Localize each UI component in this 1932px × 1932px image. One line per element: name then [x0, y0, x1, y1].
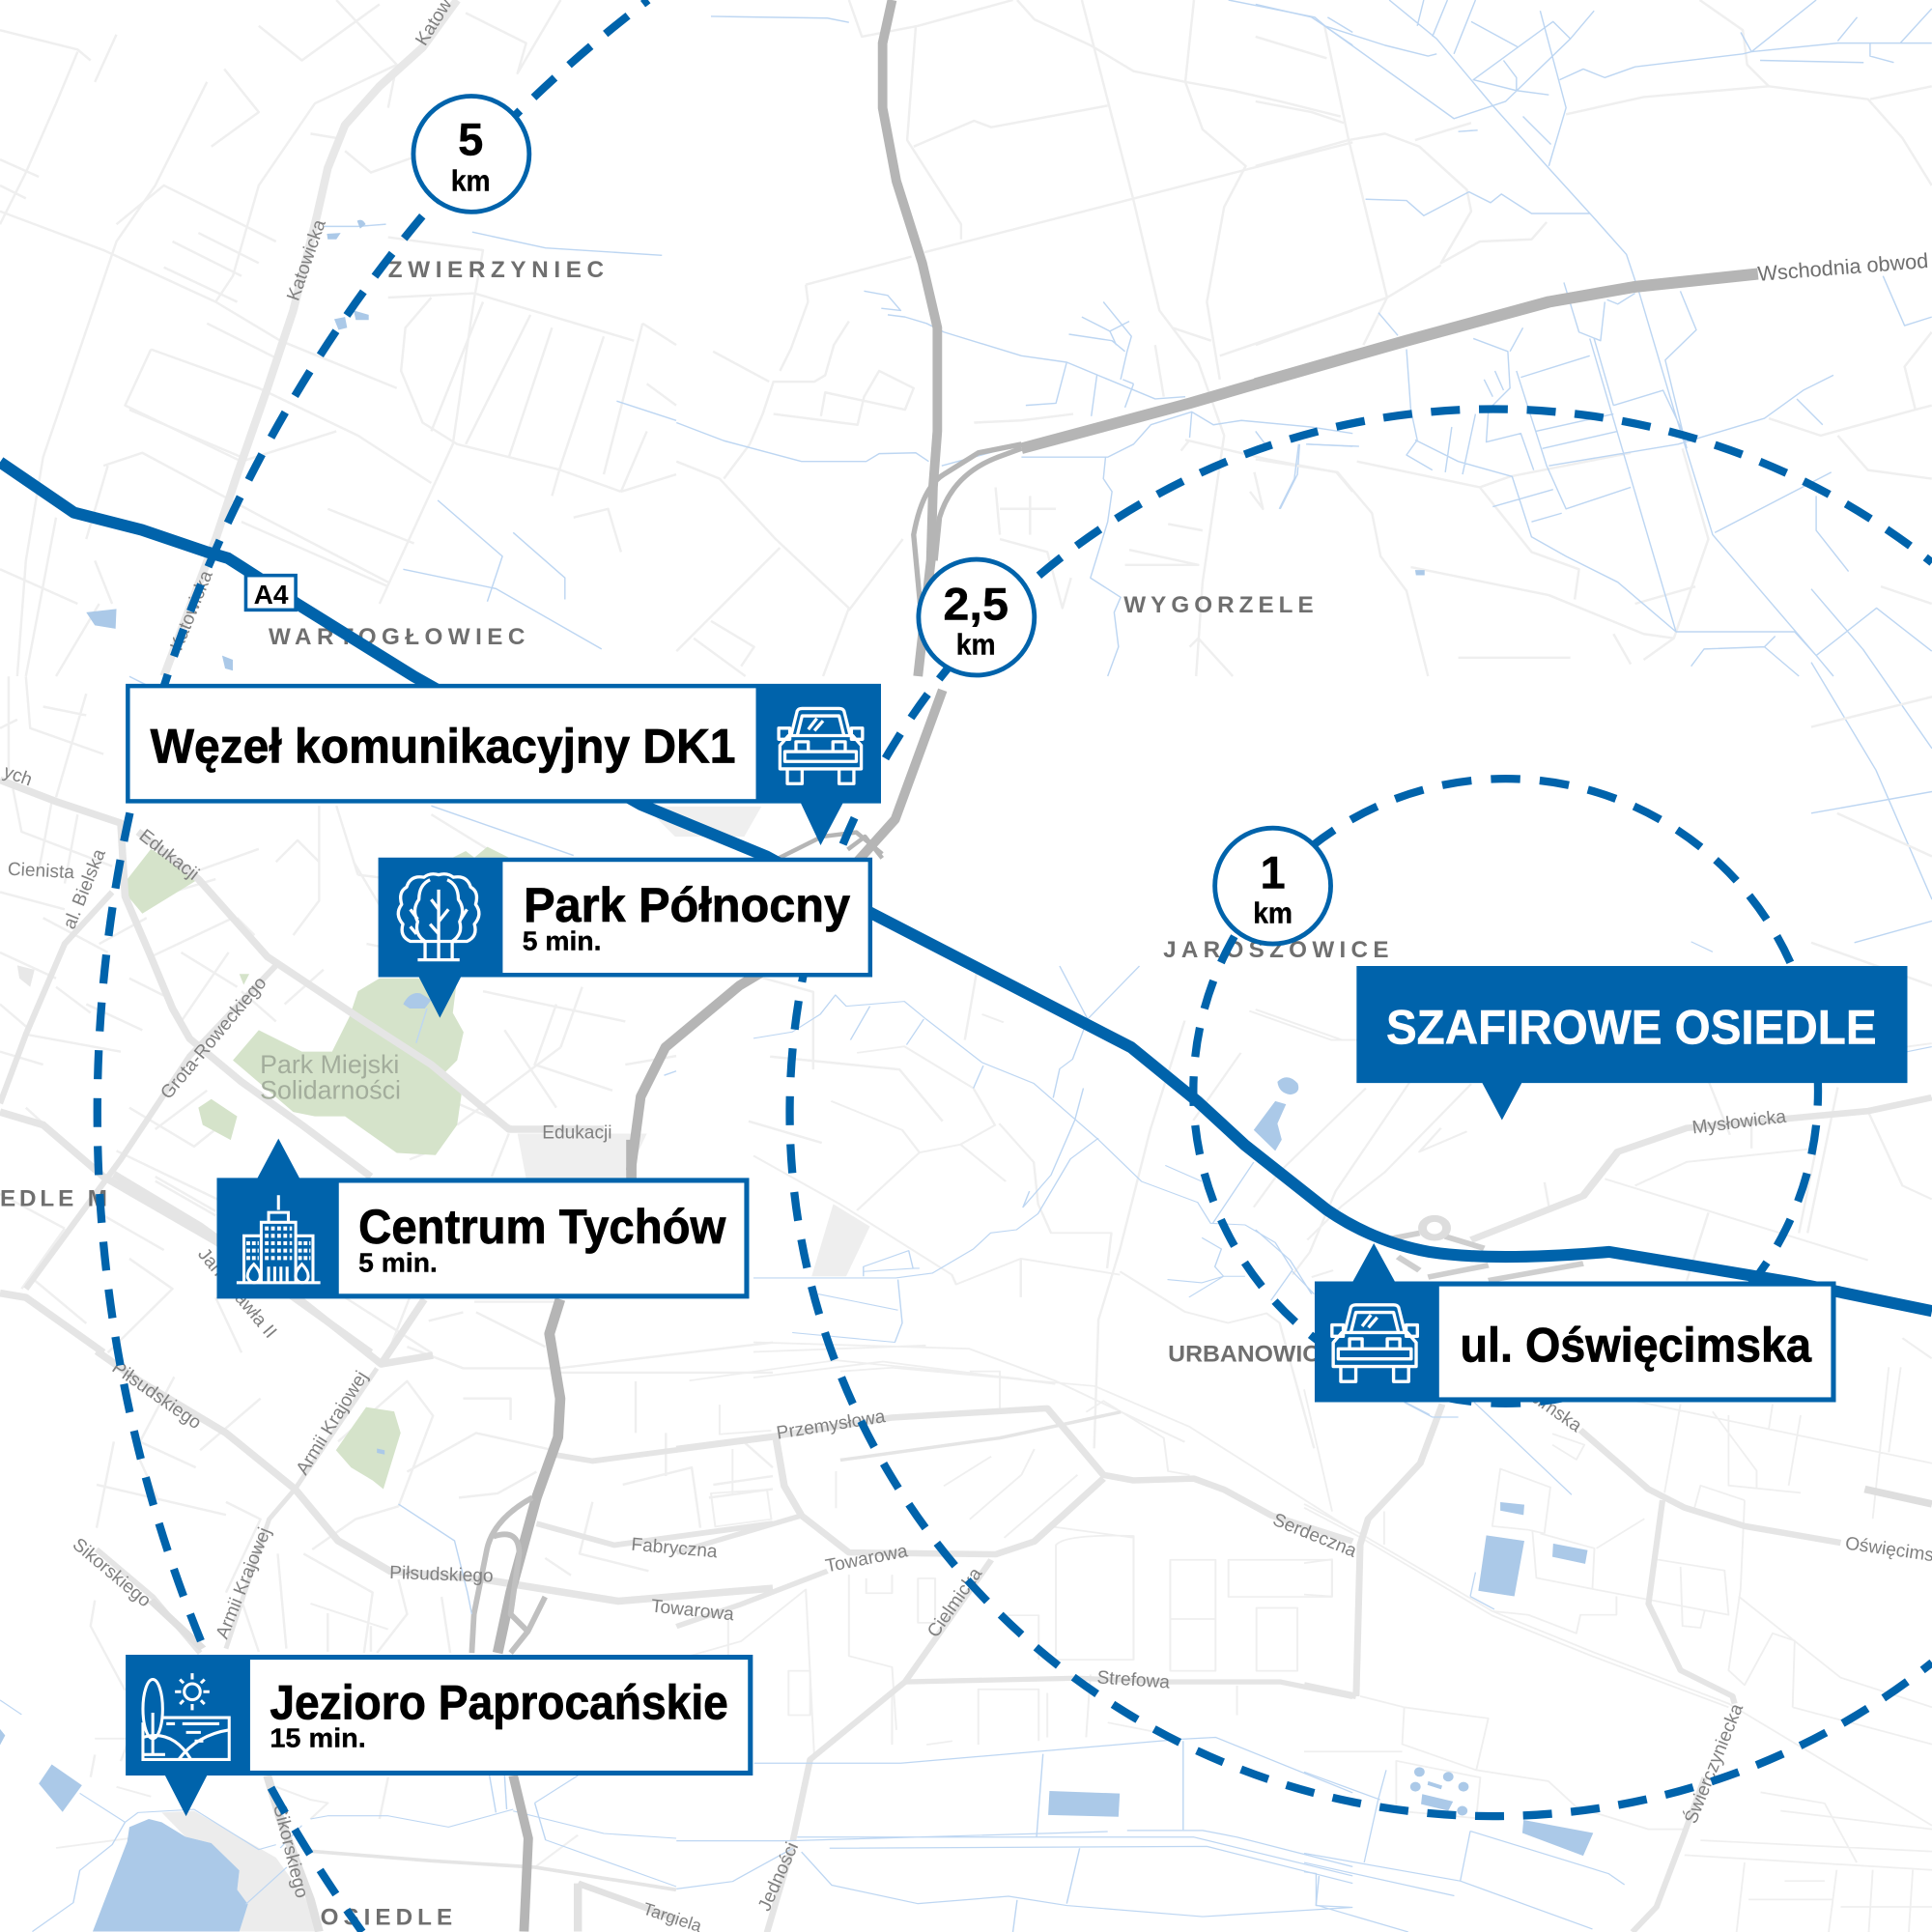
road name labels: Serdeczna	[1269, 1510, 1359, 1562]
map sector: north centre roads	[676, 0, 1352, 676]
district labels	[0, 257, 1389, 1930]
road name labels: Park Miejski	[260, 1050, 399, 1079]
road name labels: Świerczyniecka	[1680, 1700, 1747, 1827]
map sector: lake shore	[0, 1601, 676, 1932]
callout: Jezioro Paprocańskie: Jezioro Paprocańskie	[270, 1675, 728, 1729]
road name labels: Towarowa	[650, 1596, 735, 1625]
road name labels: al. Bielska	[60, 846, 110, 932]
road name labels: Piłsudskiego	[108, 1357, 205, 1434]
2,5 km badge: km	[956, 628, 996, 661]
road name labels: Mysłowicka	[1691, 1107, 1788, 1138]
1 km badge: km	[1253, 896, 1293, 929]
road name labels: Grota-Roweckiego	[156, 973, 270, 1103]
road name labels: Jana Pawła II	[193, 1244, 280, 1343]
map sector: right side streams and roads	[1811, 589, 1932, 985]
road name labels: Jedności	[754, 1839, 803, 1915]
district labels: ZWIERZYNIEC	[388, 257, 604, 283]
road name labels: Sikorskiego	[69, 1535, 155, 1611]
district labels: WARTOGŁOWIEC	[269, 624, 525, 650]
callout: Centrum Tychów: Centrum Tychów	[358, 1200, 726, 1254]
callout: Park Północny: 5 min.	[523, 925, 601, 955]
icon: car	[1332, 1305, 1417, 1381]
gray expressway link to the south	[631, 967, 770, 1171]
road name labels: Oświęcimska	[1485, 1357, 1585, 1436]
icon: car	[779, 708, 863, 783]
5 km badge	[413, 96, 529, 212]
map sector: Mysłowicka and roundabout	[1256, 942, 1932, 1358]
distance ring 1 km	[1193, 779, 1818, 1404]
road name labels: Edukacji	[135, 826, 203, 885]
road name labels: Cielmicka	[923, 1564, 986, 1641]
road sign A4	[245, 576, 296, 610]
callout: Centrum Tychów: 5 min.	[358, 1247, 438, 1277]
road name labels: Piłsudskiego	[389, 1563, 494, 1587]
road name labels: Edukacji	[542, 1123, 612, 1144]
2,5 km badge: 2,5	[943, 580, 1009, 631]
map sector: north-east streams and roads	[1256, 0, 1932, 676]
map sector: river and mid south	[753, 966, 1430, 1448]
callout: Park Północny: Park Północny	[524, 878, 850, 932]
road name labels: Fabryczna	[631, 1535, 719, 1562]
map sector: north-centre block below DK1	[640, 690, 943, 1143]
road name labels: Armii Krajowej	[213, 1524, 275, 1642]
road name labels: Strefowa	[1096, 1667, 1171, 1693]
map sector: city centre streets	[0, 676, 676, 1352]
road name labels: ych	[1, 762, 35, 790]
map sector: Oświęcimska and south-east	[1304, 1367, 1932, 1932]
callout: Centrum Tychów	[216, 1139, 750, 1298]
map sector: south industrial streets	[676, 1360, 1352, 1932]
icon: tree	[398, 874, 479, 960]
2,5 km badge	[919, 559, 1035, 675]
1 km badge	[1215, 828, 1331, 944]
district labels: URBANOWICE	[1168, 1341, 1336, 1367]
district labels: EDLE M	[0, 1186, 107, 1212]
callout: Szafirowe Osiedle: SZAFIROWE OSIEDLE	[1386, 1000, 1877, 1054]
road name labels: Sikorskiego	[269, 1803, 312, 1900]
distance ring 2.5 km	[790, 409, 1932, 1816]
callout: ul. Oświęcimska	[1315, 1243, 1836, 1403]
road name labels: Armii Krajowej	[293, 1368, 372, 1479]
gray expressway S1	[883, 0, 1352, 676]
district labels: WYGORZELE	[1123, 592, 1314, 618]
road name labels: Solidarności	[260, 1076, 401, 1105]
road name labels: Katowicka	[167, 568, 217, 654]
5 km badge: km	[451, 165, 491, 198]
callout: Jezioro Paprocańskie: 15 min.	[270, 1723, 366, 1753]
district labels: JAROSZOWICE	[1163, 937, 1389, 963]
icon: lake and sun	[143, 1673, 229, 1759]
road name labels: Katowicka	[284, 217, 330, 303]
gray expressway east section	[1256, 273, 1758, 384]
map sector: south-west streets	[97, 1140, 773, 1653]
1 km badge: 1	[1260, 848, 1286, 899]
5 km badge: 5	[458, 115, 483, 166]
distance ring 5 km	[98, 0, 648, 1932]
callout: Park Północny	[379, 858, 872, 1018]
callout: Szafirowe Osiedle	[1356, 966, 1907, 1120]
road name labels: Cienista	[7, 860, 75, 883]
road name labels: Towarowa	[824, 1541, 910, 1577]
road name labels: Wschodnia obwod	[1757, 248, 1929, 286]
icon: buildings	[237, 1195, 321, 1283]
road sign A4: A4	[254, 580, 289, 610]
callout: Jezioro Paprocańskie	[126, 1655, 753, 1816]
district labels: OSIEDLE	[321, 1904, 452, 1930]
map sector: north-west streets	[0, 0, 676, 676]
highway A4 / DK1	[0, 462, 1932, 1311]
callout: Węzeł komunikacyjny DK1	[126, 684, 881, 845]
road name labels: Przemysłowa	[775, 1406, 887, 1444]
callout: ul. Oświęcimska: ul. Oświęcimska	[1460, 1318, 1811, 1372]
callout: Węzeł komunikacyjny DK1: Węzeł komunikacyjny DK1	[151, 720, 735, 774]
